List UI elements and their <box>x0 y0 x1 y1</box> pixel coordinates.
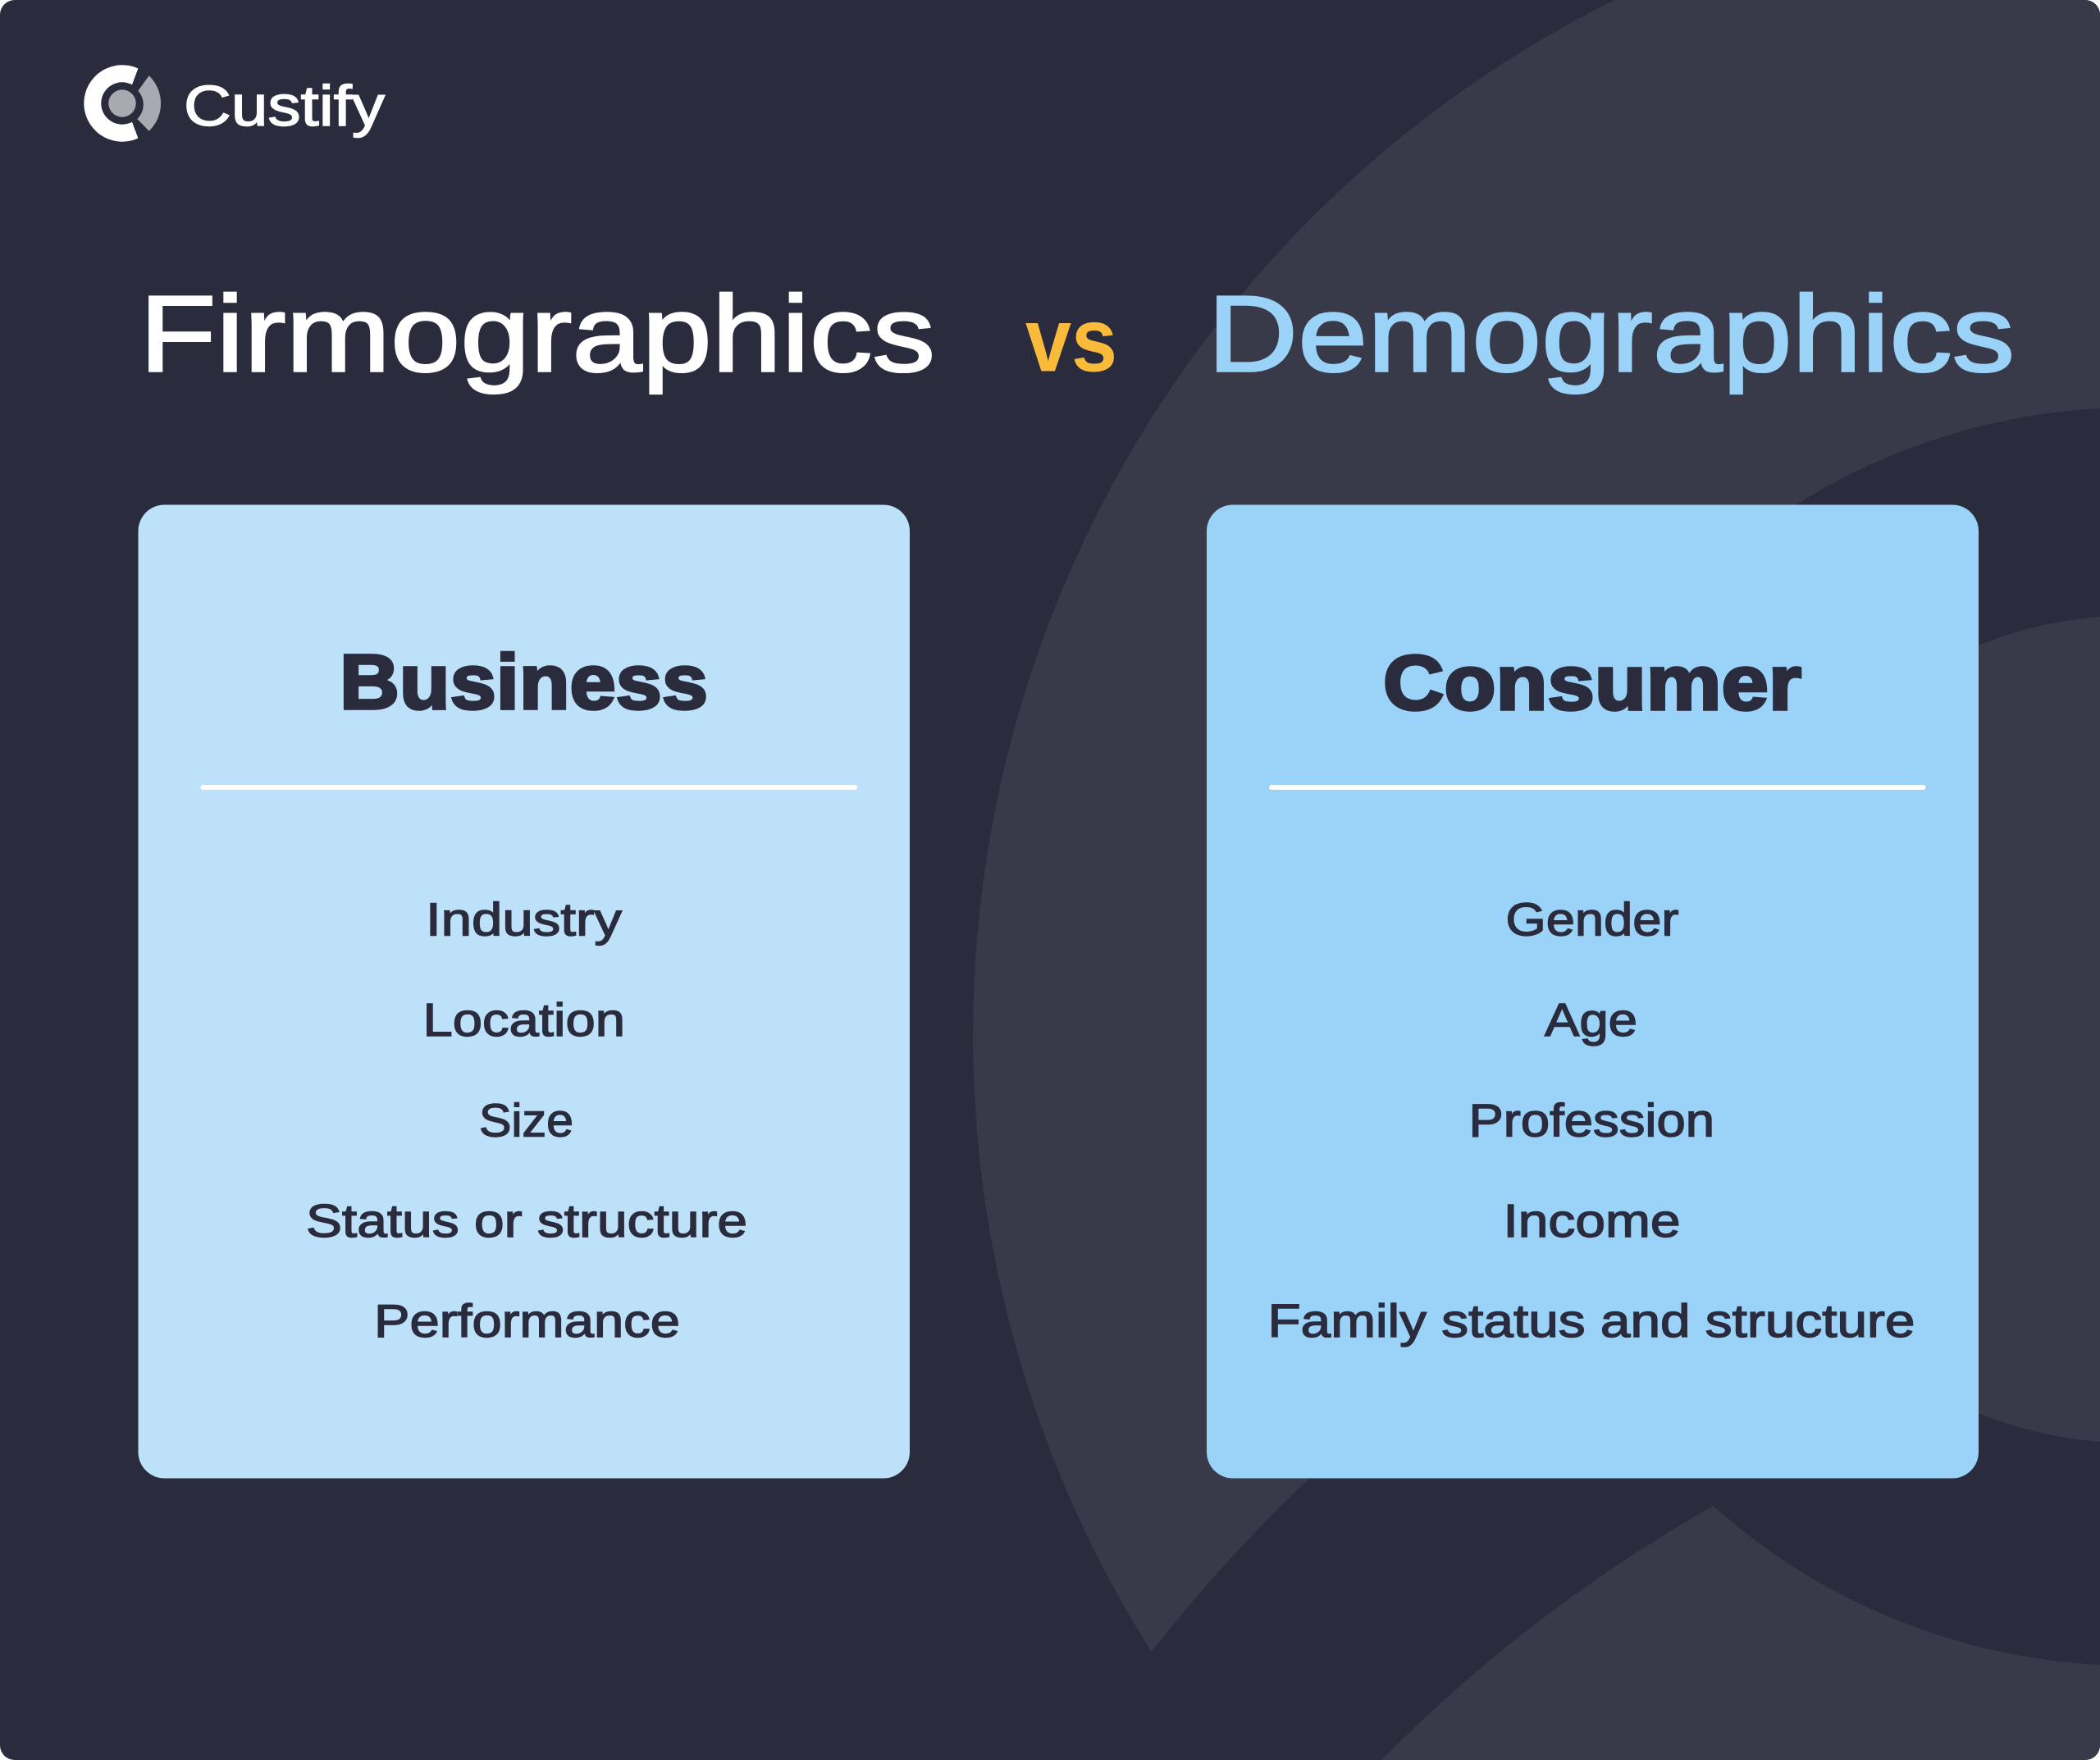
heading: Demographics: Demographics <box>1208 274 2015 394</box>
list: consumer attributes: Income <box>1503 1195 1680 1247</box>
list: business attributes: Performance <box>374 1295 680 1347</box>
list: business attributes: Size <box>479 1094 573 1147</box>
list: consumer attributes: Profession <box>1468 1094 1714 1147</box>
logo: Custify <box>84 65 385 142</box>
panel title: Consumer: Consumer <box>1383 640 1801 727</box>
list: consumer attributes: Family status and structure <box>1268 1295 1915 1347</box>
panel: Business <box>138 505 910 1478</box>
list: business attributes: Industry <box>426 894 623 946</box>
panel: Consumer <box>1207 505 1979 1478</box>
heading: vs: vs <box>1025 290 1117 390</box>
list: consumer attributes: Gender <box>1506 894 1679 946</box>
list: consumer attributes <box>1268 894 1915 1347</box>
heading: Firmographics: Firmographics <box>139 274 935 394</box>
list: business attributes <box>306 894 747 1347</box>
icon: Custify mark <box>84 65 161 142</box>
list: business attributes: Status or structure <box>306 1195 747 1247</box>
list: consumer attributes: Age <box>1545 994 1637 1046</box>
list: business attributes: Location <box>423 994 625 1046</box>
panel title: Business: Business <box>340 639 708 726</box>
wordmark: Custify <box>184 74 385 138</box>
